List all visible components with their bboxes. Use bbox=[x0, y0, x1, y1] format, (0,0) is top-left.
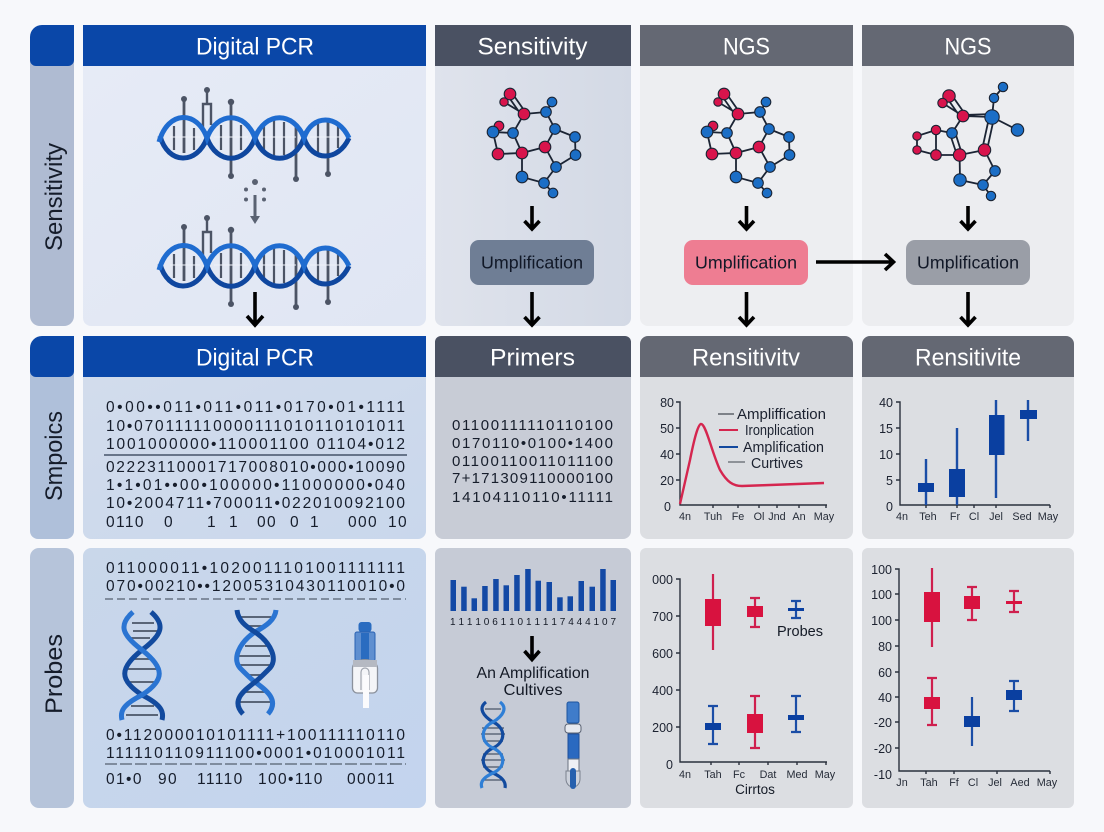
row 1 side label column bbox=[30, 25, 74, 326]
legend: Amplification bbox=[743, 440, 824, 456]
legend: Curtives bbox=[751, 456, 803, 472]
row 2 side label column bbox=[30, 336, 74, 539]
panel: probes binary and DNA bbox=[83, 548, 426, 808]
candlestick chart: 40 bbox=[879, 396, 893, 410]
binary text bottom: 01•0 bbox=[106, 771, 143, 788]
line chart: 20 bbox=[660, 474, 674, 488]
line chart: 4n bbox=[679, 511, 691, 523]
binary data block: 1001000000•110001100 01104•012 bbox=[106, 436, 405, 453]
binary data block: 0 bbox=[290, 514, 300, 531]
heading: Digital PCR bbox=[83, 336, 426, 377]
candlestick chart: -20 bbox=[874, 742, 892, 756]
binary data block: 1 bbox=[207, 514, 217, 531]
row 1 side label column: Sensitivity bbox=[41, 143, 68, 251]
binary data block: 7+171309110000100 bbox=[452, 470, 613, 487]
candlestick chart bbox=[879, 396, 1059, 523]
binary text bottom: 100•110 bbox=[258, 771, 324, 788]
binary text bottom: 11110 bbox=[197, 771, 244, 788]
heading: Sensitivity bbox=[435, 25, 631, 66]
candlestick chart: May bbox=[1038, 511, 1059, 523]
caption: amplification curves: An Amplification bbox=[476, 665, 590, 682]
icon: test tube probe bbox=[565, 702, 581, 789]
heading: Rensitivity: Rensitivitv bbox=[692, 344, 800, 372]
candlestick chart bbox=[652, 573, 836, 781]
binary text bottom: 111110110911100•0001•010001011 bbox=[106, 745, 405, 762]
bar chart bbox=[450, 569, 616, 628]
binary data block: 10•2004711•700011•022010092100 bbox=[106, 495, 405, 512]
caption: amplification curves bbox=[476, 665, 590, 699]
binary text top: 070•00210••12005310430110010•0 bbox=[106, 578, 405, 595]
candlestick chart: May bbox=[815, 769, 836, 781]
candlestick chart: Tah bbox=[920, 777, 938, 789]
caption: amplification curves: Cultives bbox=[504, 682, 562, 699]
binary text bottom bbox=[105, 727, 406, 788]
panel: digital PCR DNA bbox=[83, 25, 426, 326]
line chart: Fe bbox=[732, 511, 744, 523]
icon: probe tool bbox=[352, 622, 378, 708]
line chart: 80 bbox=[660, 396, 674, 410]
candlestick chart: 4n bbox=[679, 769, 691, 781]
candlestick chart: Jel bbox=[988, 777, 1002, 789]
candlestick chart: 700 bbox=[652, 610, 673, 624]
icon: DNA vertical centre bbox=[237, 610, 276, 714]
row 3 side label column bbox=[30, 548, 74, 808]
line chart bbox=[660, 396, 835, 523]
line chart: May bbox=[814, 511, 835, 523]
panel: probes candlestick chart B bbox=[862, 548, 1074, 808]
legend: Ironplication bbox=[745, 423, 814, 439]
panel: digital PCR binary bbox=[83, 336, 426, 539]
row 2 side label column: Smpoics bbox=[41, 411, 68, 501]
candlestick chart: Fr bbox=[950, 511, 960, 523]
candlestick chart: 100 bbox=[871, 588, 892, 602]
panel: second NGS molecule bbox=[862, 25, 1074, 326]
binary data block: 0170110•0100•1400 bbox=[452, 435, 613, 452]
heading: Digital PCR: Digital PCR bbox=[196, 34, 314, 60]
binary data block bbox=[452, 417, 613, 506]
binary data block: 01100111110110100 bbox=[452, 417, 613, 434]
line chart: An bbox=[792, 511, 806, 523]
box: Umplification pink bbox=[684, 240, 808, 285]
candlestick chart: Cl bbox=[968, 777, 978, 789]
candlestick chart: 0 bbox=[886, 500, 893, 514]
line chart: Jnd bbox=[768, 511, 786, 523]
candlestick chart: -20 bbox=[874, 716, 892, 730]
heading: Rensitivite bbox=[862, 336, 1074, 377]
binary text top: 011000011•1020011101001111111 bbox=[106, 560, 405, 577]
heading: NGS bbox=[862, 25, 1074, 66]
candlestick chart: May bbox=[1037, 777, 1058, 789]
line chart: Ol bbox=[754, 511, 764, 523]
icon: molecule bbox=[487, 88, 581, 198]
candlestick chart: Ff bbox=[949, 777, 960, 789]
candlestick chart: 5 bbox=[886, 474, 893, 488]
heading: NGS bbox=[640, 25, 853, 66]
arrow: pink box to grey box bbox=[816, 254, 894, 270]
binary data block: 01100110011011100 bbox=[452, 453, 613, 470]
box: Umplification grey: Umplification bbox=[917, 252, 1019, 272]
candlestick chart: 15 bbox=[879, 422, 893, 436]
icon: small DNA bbox=[481, 702, 505, 788]
binary data block: 1 bbox=[310, 514, 320, 531]
candlestick chart bbox=[871, 563, 1058, 789]
panel: probes bar chart bbox=[435, 548, 631, 808]
binary text top bbox=[105, 560, 406, 599]
candlestick chart: -10 bbox=[874, 768, 892, 782]
candlestick chart: Sed bbox=[1012, 511, 1032, 523]
legend: Ampliffication bbox=[737, 407, 826, 423]
binary data block: 0 bbox=[164, 514, 174, 531]
binary data block: 1 bbox=[229, 514, 239, 531]
icon: molecule bbox=[701, 88, 795, 198]
heading: Digital PCR bbox=[83, 25, 426, 66]
box: Umplification pink: Umplification bbox=[695, 252, 797, 272]
candlestick chart: Jel bbox=[989, 511, 1003, 523]
panel: amplification line chart bbox=[640, 336, 853, 539]
binary data block: 000 bbox=[348, 514, 378, 531]
binary data block: 10 bbox=[388, 514, 408, 531]
heading: Primers: Primers bbox=[490, 344, 575, 372]
label: Probes: Probes bbox=[777, 624, 823, 640]
heading: Digital PCR: Digital PCR bbox=[196, 344, 314, 372]
heading: NGS: NGS bbox=[944, 34, 992, 60]
heading: NGS: NGS bbox=[723, 34, 770, 60]
binary text bottom: 90 bbox=[158, 771, 178, 788]
candlestick chart: 200 bbox=[652, 721, 673, 735]
heading: Rensitivity bbox=[640, 336, 853, 377]
arrow: molecule to box bbox=[960, 206, 976, 229]
candlestick chart: Teh bbox=[919, 511, 937, 523]
arrow: box down bbox=[739, 292, 754, 325]
binary data block: 1•1•01••00•100000•11000000•040 bbox=[106, 477, 405, 494]
binary data block: 0110 bbox=[106, 514, 145, 531]
binary data block: 00 bbox=[257, 514, 277, 531]
binary data block: 10•070111110000111010110101011 bbox=[106, 418, 405, 435]
candlestick chart: 40 bbox=[878, 691, 892, 705]
arrow: molecule to box bbox=[524, 206, 540, 229]
icon: DNA helix with probes bottom bbox=[159, 215, 349, 310]
binary text bottom: 0•112000010101111+100111110110 bbox=[106, 727, 405, 744]
candlestick chart: 80 bbox=[878, 640, 892, 654]
line chart: 0 bbox=[664, 500, 671, 514]
candlestick chart: Med bbox=[786, 769, 808, 781]
icon: droplet dots and small arrow bbox=[244, 179, 266, 224]
candlestick chart: Cl bbox=[969, 511, 979, 523]
candlestick chart: 0 bbox=[666, 758, 673, 772]
arrow: down from digital PCR bbox=[247, 292, 263, 325]
box: Umplification slate: Umplification bbox=[481, 252, 583, 272]
row 3 side label column: Probes bbox=[41, 634, 68, 714]
candlestick chart: 100 bbox=[871, 614, 892, 628]
candlestick chart: Tah bbox=[704, 769, 722, 781]
box: Umplification grey bbox=[906, 240, 1030, 285]
binary data block: 14104110110•11111 bbox=[452, 489, 613, 506]
candlestick chart: 4n bbox=[896, 511, 908, 523]
heading: Sensitivity: Sensitivity bbox=[478, 34, 588, 60]
panel: probes candlestick chart A bbox=[640, 548, 853, 808]
candlestick chart: 100 bbox=[871, 563, 892, 577]
arrow: bars to caption bbox=[524, 636, 540, 660]
arrow: box down bbox=[960, 292, 976, 325]
panel: primers binary bbox=[435, 336, 631, 539]
candlestick chart: 600 bbox=[652, 647, 673, 661]
candlestick chart: Jn bbox=[896, 777, 908, 789]
heading: Primers bbox=[435, 336, 631, 377]
icon: DNA vertical left bbox=[121, 612, 163, 720]
candlestick chart: Dat bbox=[760, 769, 776, 781]
candlestick chart: 400 bbox=[652, 684, 673, 698]
icon: variant molecule bbox=[913, 82, 1024, 201]
axis caption: Cirrtos bbox=[735, 782, 775, 797]
line chart: Tuh bbox=[704, 511, 722, 523]
binary data block bbox=[104, 399, 408, 531]
bar chart: 1 1 1 1 0 6 1 1 0 1 1 1 1 7 4 4 4 1 0 7 bbox=[450, 617, 616, 628]
panel: sensitivity molecule bbox=[435, 25, 631, 326]
arrow: box down bbox=[524, 292, 540, 325]
legend bbox=[718, 407, 826, 472]
line chart: 40 bbox=[660, 448, 674, 462]
candlestick chart: 60 bbox=[878, 666, 892, 680]
panel: blue candlestick chart bbox=[862, 336, 1074, 539]
heading: Rensitivite: Rensitivite bbox=[915, 344, 1021, 372]
arrow: molecule to box bbox=[739, 206, 754, 229]
binary data block: 02223110001717008010•000•10090 bbox=[106, 459, 405, 476]
candlestick chart: 10 bbox=[879, 448, 893, 462]
panel: NGS molecule bbox=[640, 25, 853, 326]
candlestick chart: 000 bbox=[652, 573, 673, 587]
candlestick chart: Fc bbox=[733, 769, 746, 781]
box: Umplification slate bbox=[470, 240, 594, 285]
binary data block: 0•00••011•011•011•0170•01•1111 bbox=[106, 399, 405, 416]
icon: DNA helix with probes top bbox=[159, 87, 349, 182]
binary text bottom: 00011 bbox=[347, 771, 396, 788]
candlestick chart: Aed bbox=[1010, 777, 1030, 789]
line chart: 50 bbox=[660, 422, 674, 436]
